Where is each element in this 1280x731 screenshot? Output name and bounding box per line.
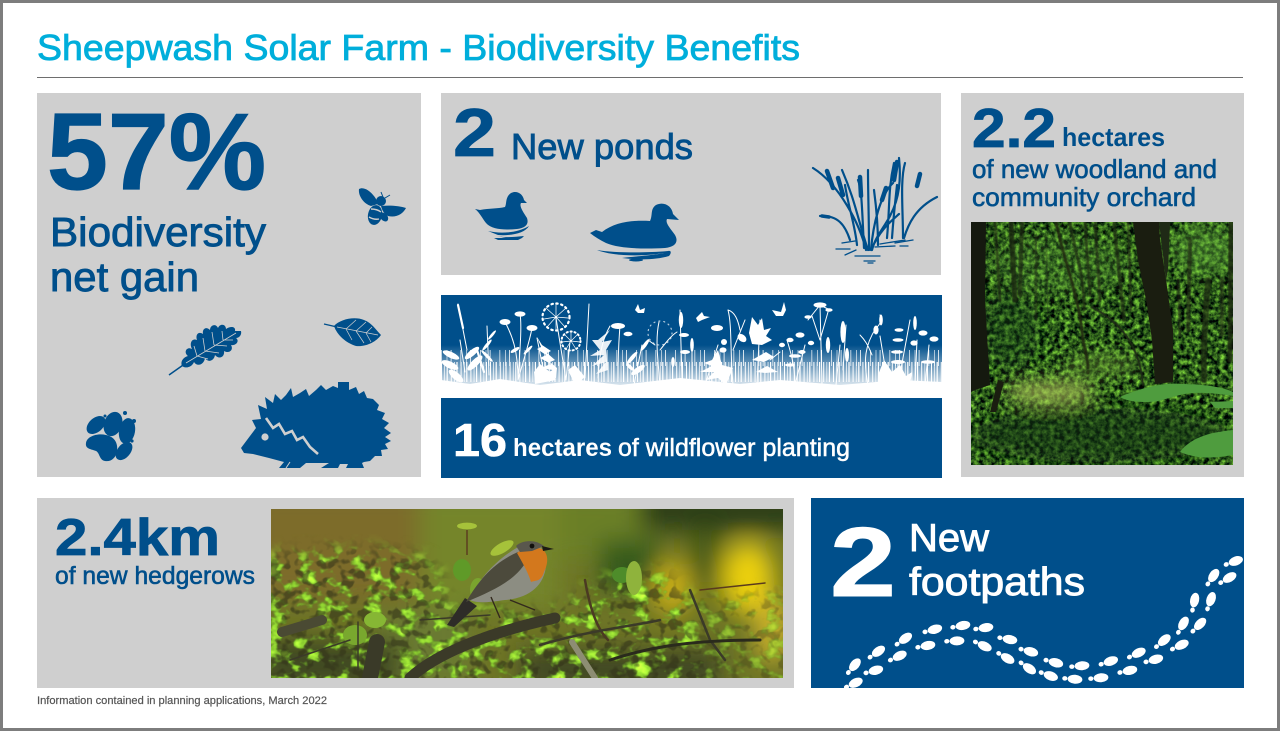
dandelion seed heads [542, 304, 672, 350]
panel: new footpaths [811, 498, 1244, 692]
label: new woodland and community orchard: community orchard [972, 182, 1196, 212]
leaves and flower heads [440, 302, 938, 385]
icon: hedgehog [241, 382, 391, 468]
sprig leaves [343, 523, 642, 645]
photo: robin on a hedge [271, 509, 783, 678]
icon: large duck [590, 204, 679, 262]
label: new woodland and community orchard: of new woodland and [972, 154, 1217, 184]
label: biodiversity net gain: Biodiversity [50, 209, 267, 255]
robin [447, 541, 554, 627]
plant stems [458, 304, 929, 385]
statistic 2 ponds: 2 [453, 95, 496, 171]
icon: paw print [83, 409, 137, 463]
statistic 2.2 hectares: 2.2 [972, 97, 1056, 159]
icon: bee [359, 188, 406, 226]
panel: woodland and orchard [961, 93, 1244, 477]
panel: biodiversity net gain [37, 91, 421, 477]
hedge branches [282, 580, 765, 678]
source note: Information contained in planning applications, March 2022 [37, 695, 327, 707]
foreground leaves [1120, 384, 1233, 458]
statistic 2.4km: 2.4km [55, 509, 220, 567]
icon: footprints trail [842, 554, 1244, 692]
soft haze of grass [441, 345, 942, 385]
panel: new hedgerows [37, 490, 810, 690]
label: new footpaths: footpaths [909, 561, 1085, 604]
label: new footpaths: New [909, 517, 990, 560]
icon: oak leaf [169, 325, 241, 375]
tree trunks [995, 222, 1231, 385]
label: 16 hectares of wildflower planting [453, 414, 850, 466]
statistic 2.2 hectares [972, 97, 1165, 159]
solid ground of grass [441, 378, 942, 398]
icon: beech leaf [324, 318, 381, 346]
statistic 2 footpaths: 2 [830, 507, 896, 617]
label: new ponds: New ponds [511, 126, 693, 167]
label: of new hedgerows: of new hedgerows [55, 562, 255, 590]
label: biodiversity net gain [50, 209, 267, 300]
label: biodiversity net gain: net gain [50, 254, 199, 300]
illustration: wildflower meadow silhouette [440, 302, 942, 398]
label: 16 hectares of wildflower planting: of wildflower planting [618, 434, 850, 462]
label: new footpaths [909, 517, 1085, 604]
panel: wildflower planting [440, 295, 942, 478]
panel: new ponds [441, 93, 941, 275]
label: new woodland and community orchard [972, 154, 1217, 212]
label: 16 hectares of wildflower planting: 16 [453, 414, 507, 466]
butterflies [635, 302, 786, 322]
statistic 57%: 57% [47, 91, 266, 213]
icon: reeds [813, 158, 937, 263]
statistic 2.2 hectares: hectares [1062, 122, 1165, 152]
photo: woodland [970, 222, 1240, 465]
icon: small duck [475, 192, 529, 240]
tall grass blades [441, 362, 942, 382]
label: 16 hectares of wildflower planting: hectares [513, 434, 612, 462]
title: Sheepwash Solar Farm - Biodiversity Benefits [37, 27, 800, 68]
